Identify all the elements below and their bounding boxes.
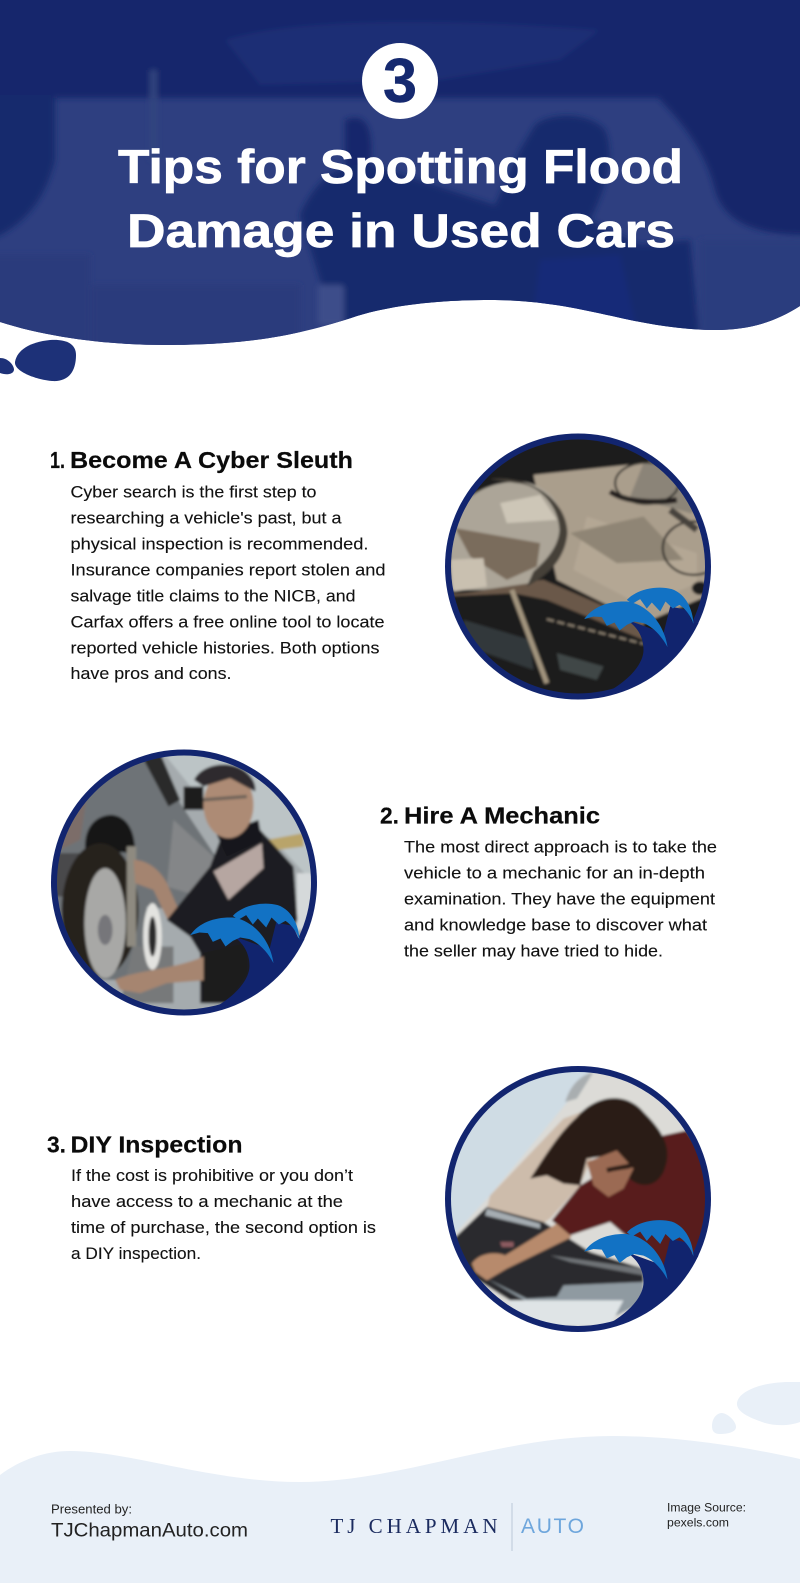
heading 1: 1.: [50, 447, 65, 473]
body 2: The most direct approach is to take the: [404, 837, 717, 856]
icon: wave: [584, 1220, 698, 1325]
footer: [0, 1436, 800, 1583]
logo: TJ Chapman Auto: TJ CHAPMAN: [330, 1514, 498, 1538]
body 1: have pros and cons.: [70, 664, 232, 683]
body 1: researching a vehicle's past, but a: [70, 508, 342, 527]
section 3 text: [47, 1131, 376, 1263]
decorative blobs bottom: [712, 1382, 800, 1434]
body 1: salvage title claims to the NICB, and: [70, 586, 356, 605]
heading 3: DIY Inspection: [70, 1131, 242, 1157]
image source: pexels.com: [667, 1516, 729, 1530]
number badge: [362, 43, 438, 119]
body 3: [71, 1166, 376, 1263]
photo circle 1: magnifier and book: [444, 433, 724, 700]
section 1 text: [50, 447, 386, 683]
logo: TJ Chapman Auto: [330, 1503, 584, 1551]
body 2: the seller may have tried to hide.: [404, 941, 663, 960]
icon: wave: [584, 588, 698, 692]
presented by: [51, 1501, 248, 1542]
presented by: TJChapmanAuto.com: [51, 1521, 248, 1542]
body 1: physical inspection is recommended.: [70, 534, 368, 553]
section 2 text: [380, 802, 717, 960]
body 2: and knowledge base to discover what: [404, 915, 707, 934]
image source: [667, 1501, 746, 1530]
body 1: Insurance companies report stolen and: [70, 560, 386, 579]
photo circle 2: mechanic at wheel: [50, 750, 323, 1020]
body 3: time of purchase, the second option is: [71, 1218, 376, 1237]
heading 2: Hire A Mechanic: [404, 802, 600, 828]
photo circle 3: person under car hood: [444, 1065, 713, 1335]
heading 1: Become A Cyber Sleuth: [70, 447, 353, 473]
icon: wave: [190, 904, 304, 1008]
body 1: [70, 482, 386, 683]
body 3: a DIY inspection.: [71, 1244, 201, 1263]
body 1: Cyber search is the first step to: [70, 482, 316, 501]
body 2: examination. They have the equipment: [404, 889, 715, 908]
body 2: [404, 837, 717, 960]
image source: Image Source:: [667, 1501, 746, 1515]
title: Tips for Spotting Flood: [118, 140, 683, 193]
title: [118, 140, 683, 257]
title: Damage in Used Cars: [127, 204, 675, 257]
logo: TJ Chapman Auto: AUTO: [521, 1515, 584, 1538]
heading 3: 3.: [47, 1131, 66, 1157]
body 3: have access to a mechanic at the: [71, 1192, 343, 1211]
header photo banner: [0, 0, 800, 350]
number badge: 3: [383, 47, 417, 116]
decorative blobs top: [0, 340, 76, 381]
body 1: Carfax offers a free online tool to locate: [70, 612, 384, 631]
heading 2: 2.: [380, 802, 399, 828]
body 1: reported vehicle histories. Both options: [70, 638, 380, 657]
presented by: Presented by:: [51, 1501, 132, 1516]
body 2: vehicle to a mechanic for an in-depth: [404, 863, 705, 882]
body 3: If the cost is prohibitive or you don’t: [71, 1166, 353, 1185]
